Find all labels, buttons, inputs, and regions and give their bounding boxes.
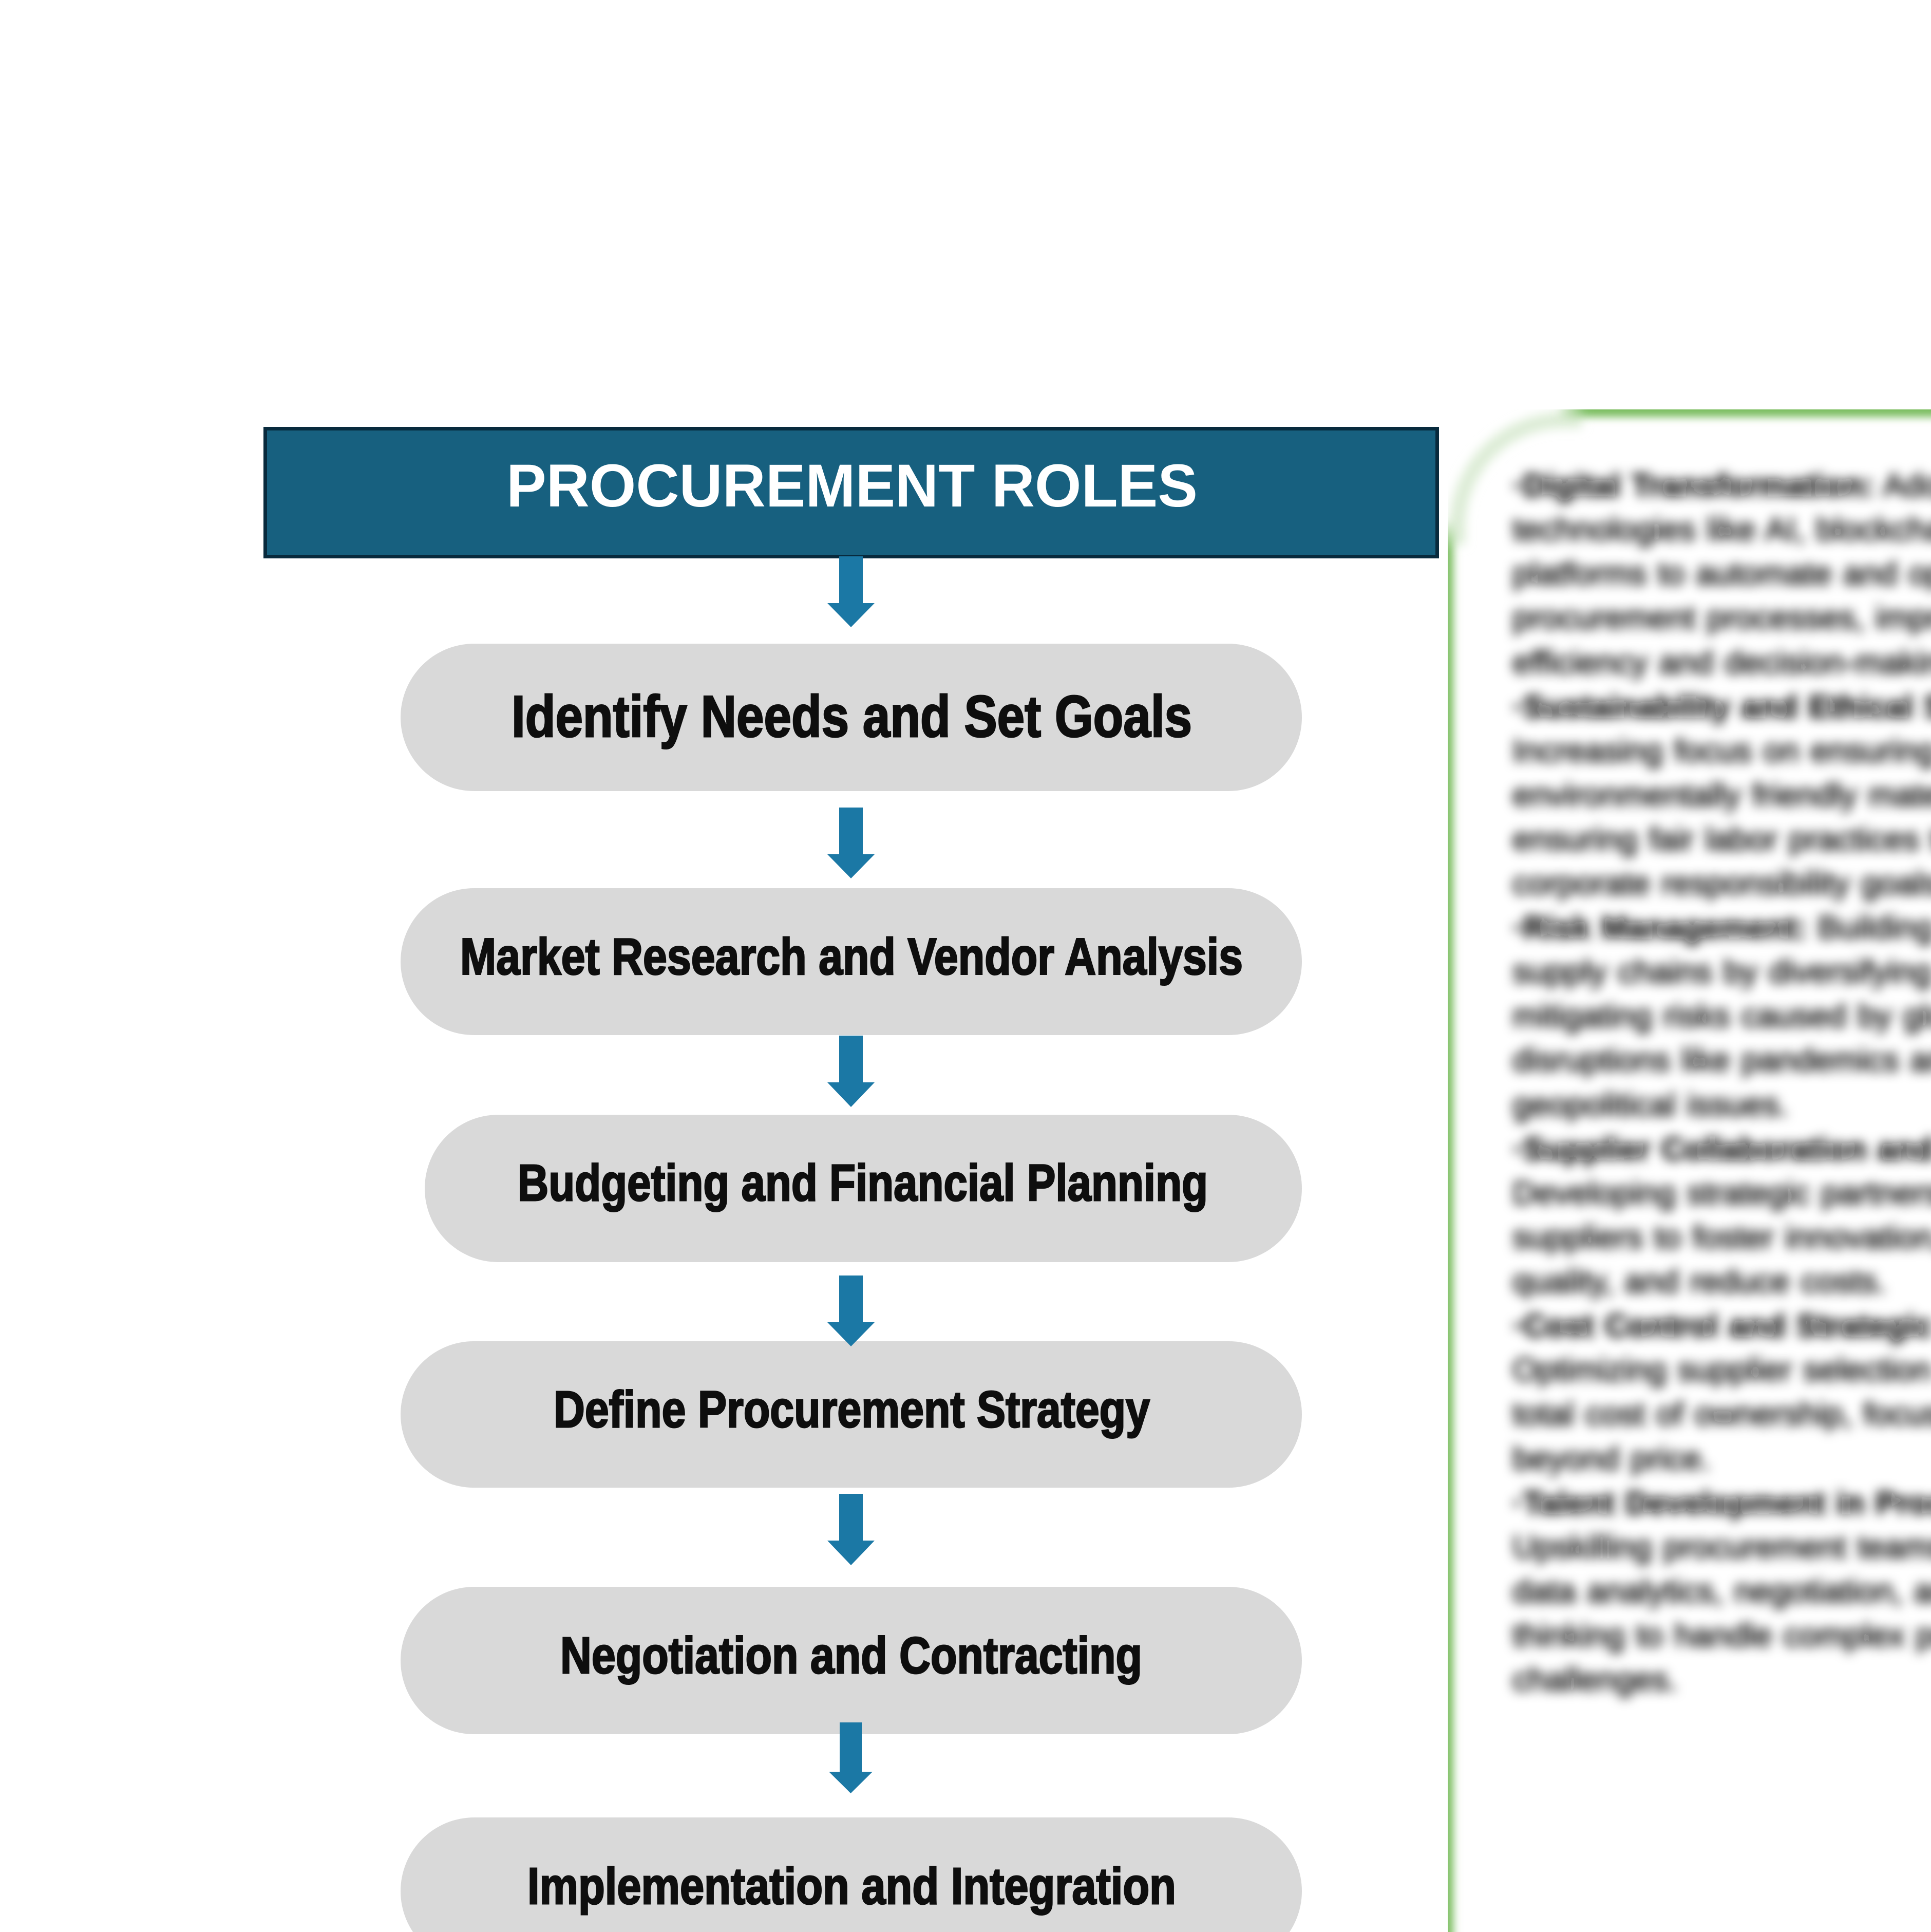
step 4: procurement strategy <box>401 1341 1302 1488</box>
step 2: market research <box>401 888 1302 1035</box>
step 5: negotiation <box>401 1587 1302 1734</box>
arrow: step 5 to step 6 <box>829 1722 873 1793</box>
step 5: negotiation: Negotiation and Contracting <box>560 1627 1142 1684</box>
blurred body text: challenges. <box>1512 1662 1677 1698</box>
panel: blurred trends card <box>1444 408 1931 1932</box>
step 1: identify needs: Identify Needs and Set Goals <box>512 684 1192 749</box>
blurred body text <box>1512 467 1931 1698</box>
title banner: PROCUREMENT ROLES <box>506 452 1198 520</box>
arrow: banner to step 1 <box>827 556 875 627</box>
blurred body text: Increasing focus on ensuring <box>1512 733 1931 769</box>
panel: procurement roles flowchart <box>265 428 1437 1932</box>
arrow: step 3 to step 4 <box>827 1276 875 1346</box>
blurred body text: beyond price. <box>1512 1441 1710 1477</box>
blurred body text: geopolitical issues. <box>1512 1087 1788 1123</box>
card border <box>1444 408 1931 1932</box>
arrow: step 2 to step 3 <box>827 1036 875 1107</box>
title banner <box>265 428 1437 557</box>
step 4: procurement strategy: Define Procurement Strategy <box>554 1381 1150 1438</box>
step 6: implementation: Implementation and Integration <box>527 1858 1176 1915</box>
step 3: budgeting <box>425 1115 1302 1262</box>
arrow: step 1 to step 2 <box>827 808 875 878</box>
blurred body text: quality, and reduce costs. <box>1512 1264 1886 1300</box>
step 6: implementation <box>401 1817 1302 1932</box>
step 2: market research: Market Research and Vendor Analysis <box>460 928 1243 985</box>
step 1: identify needs <box>401 644 1302 791</box>
step 3: budgeting: Budgeting and Financial Planning <box>518 1154 1208 1212</box>
arrow: step 4 to step 5 <box>827 1494 875 1565</box>
